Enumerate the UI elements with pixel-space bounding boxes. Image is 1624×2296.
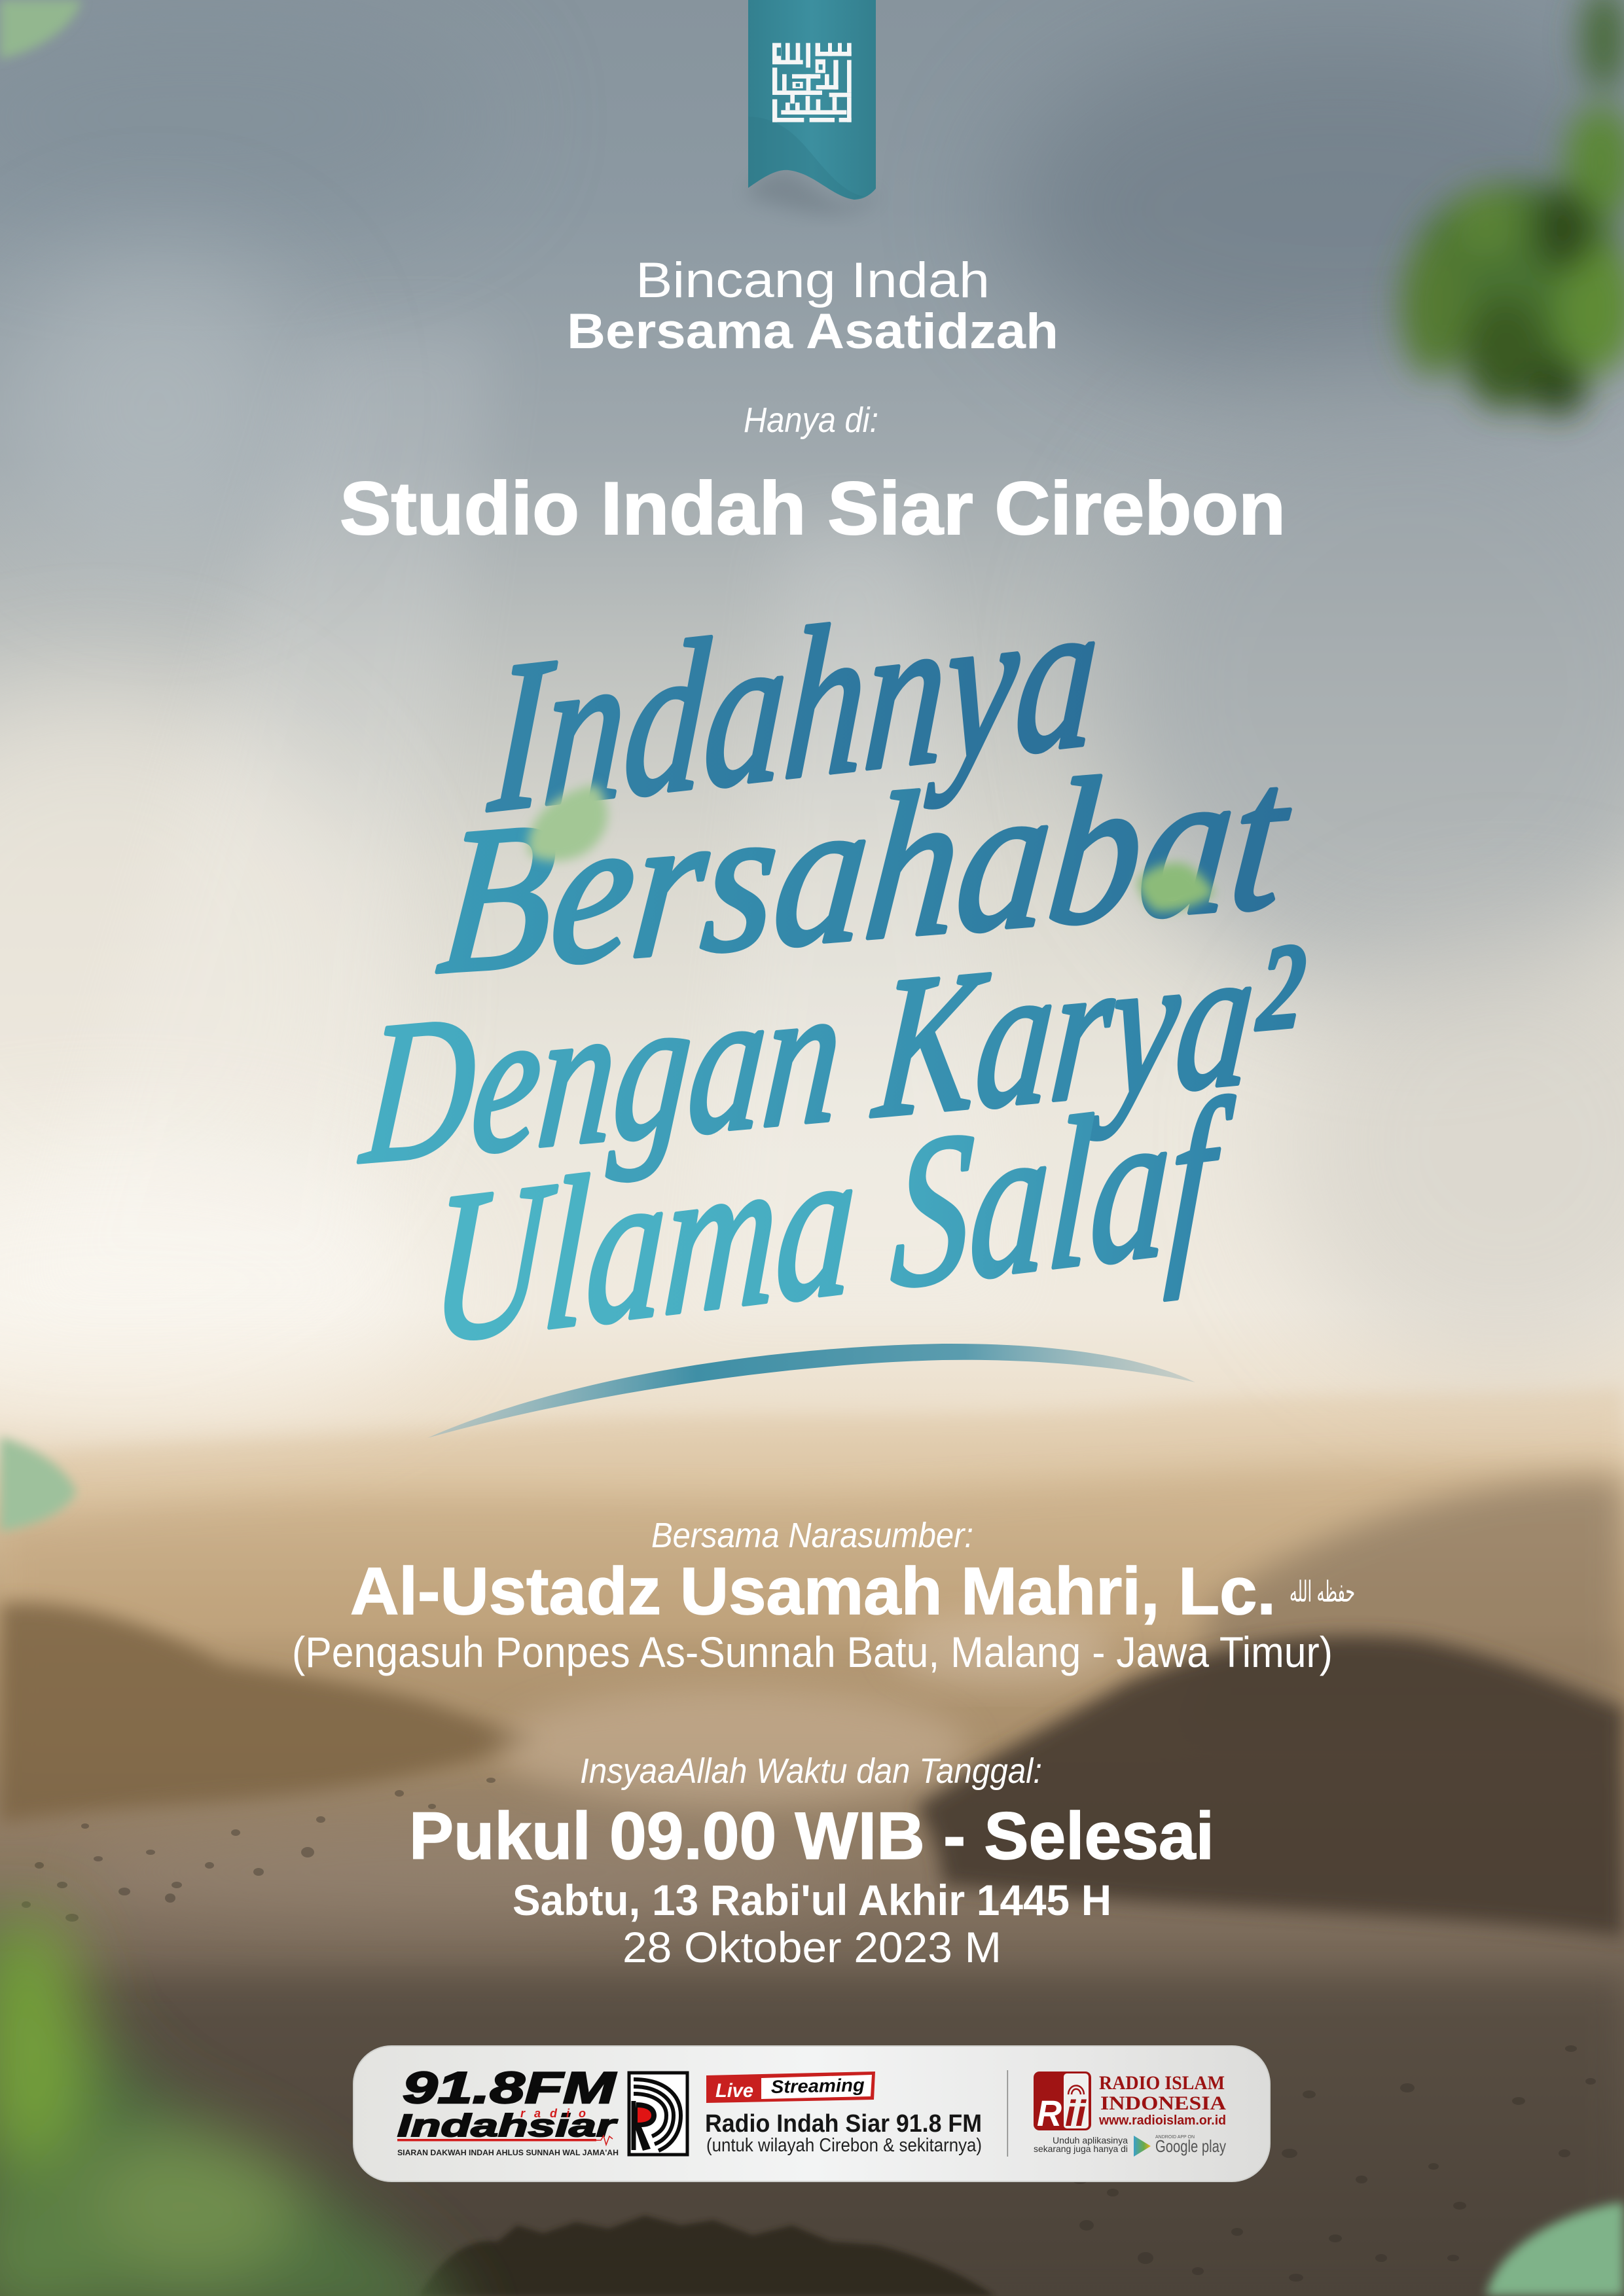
- ribbon bookmark with kufic emblem: [748, 0, 876, 214]
- honorific arabic: حفظه الله: [1290, 1575, 1355, 1609]
- label: Hanya di: Hanya di:: [744, 401, 878, 440]
- icon: google play: ANDROID APP ON: [1155, 2135, 1195, 2140]
- badge: Live Streaming: Live: [715, 2080, 753, 2102]
- logo: 91.8FM radio Indah Siar: SIARAN DAKWAH INDAH AHLUS SUNNAH WAL JAMA'AH: [397, 2148, 619, 2157]
- speaker name: Al-Ustadz Usamah Mahri, Lc.: [350, 1554, 1276, 1628]
- leaf: left edge: [0, 1437, 77, 1532]
- label: Bersama Narasumber: Bersama Narasumber:: [651, 1516, 973, 1555]
- leaf: top left corner: [0, 0, 82, 59]
- hijri date: Sabtu, 13 Rabi'ul Akhir 1445 H: [513, 1876, 1111, 1924]
- right island: [916, 1636, 1624, 1937]
- foliage: blurred leaves bottom left: [0, 1898, 471, 2296]
- pill background: [353, 2046, 1270, 2181]
- heading: Bersama Asatidzah: Bersama Asatidzah: [567, 304, 1058, 359]
- logo: 91.8FM radio Indah Siar: radio: [520, 2107, 595, 2120]
- brush underline: [427, 1344, 1195, 1438]
- logo: R emblem: [629, 2073, 687, 2155]
- badge: Live Streaming: [706, 2072, 875, 2103]
- leaf: bottom right corner: [1486, 2203, 1624, 2296]
- logo: Radio Islam Indonesia: RADIO ISLAM: [1099, 2072, 1225, 2094]
- logo: Radio Islam Indonesia: www.radioislam.or.id: [1098, 2113, 1226, 2128]
- logo: 91.8FM radio Indah Siar: 91.8FM: [403, 2063, 617, 2113]
- ribbon shadow: [748, 171, 876, 214]
- leaf: over title left: [528, 784, 607, 861]
- text: app download note: sekarang juga hanya di: [1034, 2144, 1128, 2154]
- distant ridges: [0, 1388, 1624, 1636]
- bright water: [497, 1689, 969, 1806]
- ribbon: [748, 0, 876, 200]
- heading: Studio Indah Siar Cirebon: Studio Indah Siar Cirebon: [340, 467, 1286, 550]
- logo: Radio Islam Indonesia: ii: [1065, 2092, 1087, 2134]
- logo: Radio Islam Indonesia: INDONESIA: [1100, 2092, 1226, 2114]
- title line: Bersahabat: Bersahabat: [431, 719, 1301, 1017]
- logo: 91.8FM radio Indah Siar: [397, 2063, 619, 2157]
- logo: Radio Islam Indonesia: [1034, 2072, 1226, 2134]
- gregorian date: 28 Oktober 2023 M: [623, 1923, 1001, 1971]
- foliage: blurred tree top right: [1401, 0, 1624, 416]
- leaf: over title right: [1138, 863, 1215, 912]
- kufic emblem: [772, 43, 852, 122]
- text: coverage area: (untuk wilayah Cirebon & sekitarnya): [706, 2135, 982, 2156]
- text: station name: Radio Indah Siar 91.8 FM: [705, 2110, 982, 2138]
- icon: google play: [1134, 2135, 1226, 2157]
- badge: Live Streaming: Streaming: [770, 2075, 865, 2097]
- heading: Bincang Indah: Bincang Indah: [636, 253, 990, 308]
- boats: [22, 1778, 1596, 2282]
- left island: [0, 1602, 543, 1823]
- speaker affiliation: (Pengasuh Ponpes As-Sunnah Batu, Malang - Jawa Timur): [292, 1628, 1333, 1676]
- time: Pukul 09.00 WIB - Selesai: [409, 1799, 1214, 1873]
- title line: Ulama Salaf: Ulama Salaf: [426, 1054, 1239, 1389]
- icon: google play: Google play: [1155, 2136, 1226, 2156]
- label: waktu dan tanggal: InsyaaAllah Waktu dan Tanggal:: [580, 1751, 1042, 1791]
- main title: brush script: [354, 551, 1312, 1389]
- footer panel: radio logos: [353, 2046, 1270, 2181]
- text: app download note: [1034, 2135, 1128, 2154]
- title line: Indahnya: Indahnya: [482, 551, 1105, 857]
- text: app download note: Unduh aplikasinya: [1053, 2135, 1128, 2145]
- logo: Radio Islam Indonesia: R: [1037, 2092, 1062, 2134]
- logo: 91.8FM radio Indah Siar: Indahsiar: [397, 2109, 618, 2144]
- title line: Dengan Karya2: Dengan Karya²: [354, 899, 1312, 1206]
- bottom tree line: [419, 2215, 995, 2296]
